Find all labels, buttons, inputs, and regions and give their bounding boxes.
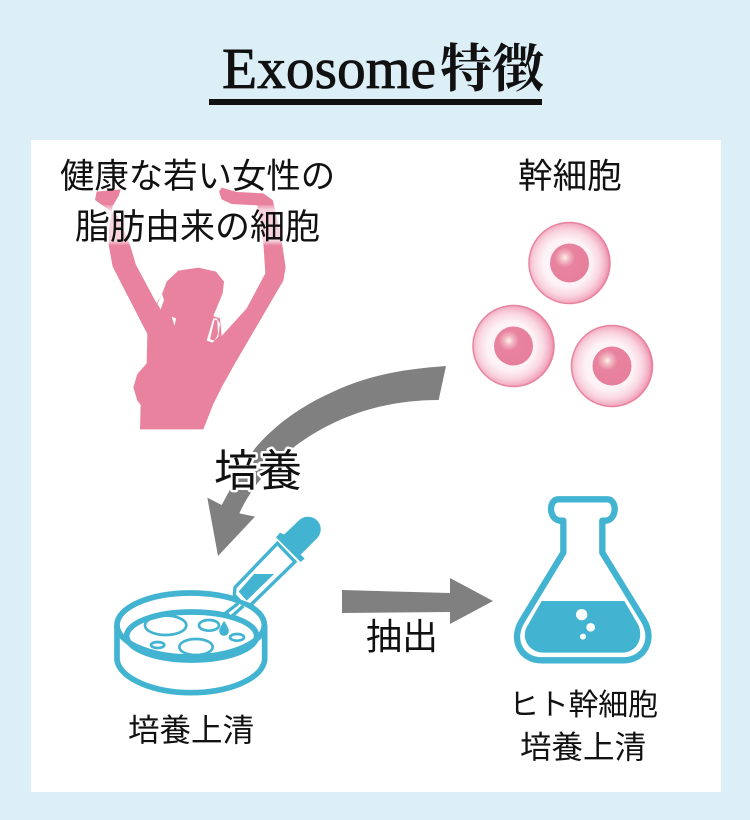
arrow: extraction (342, 578, 493, 624)
text: human stem cell supernatant label (509, 689, 658, 765)
text: donor label (60, 158, 335, 247)
icon: dropper liquid (239, 574, 274, 601)
panel: white content area (31, 140, 721, 792)
text: donor label: 健康な若い女性の (60, 158, 335, 196)
icon: dropper tube (234, 543, 295, 605)
icon: woman silhouette (90, 188, 290, 429)
text: culture supernatant label: 培養上清 (128, 712, 254, 748)
icon: petri dish and dropper (117, 517, 321, 693)
text: extraction label: 抽出 (366, 616, 438, 657)
icon: droplet (219, 621, 229, 636)
text: culture label: 培養 (214, 447, 302, 496)
text: stem cell label: 幹細胞 (518, 158, 622, 196)
text: donor label: 脂肪由来の細胞 (75, 208, 320, 247)
title (209, 27, 544, 105)
icon: stem cells (473, 222, 652, 406)
title: Exosome (222, 36, 436, 101)
arrow: culture curve (207, 366, 446, 556)
icon: flask (517, 499, 648, 660)
text: human stem cell supernatant label: 培養上清 (520, 729, 646, 765)
icon: dropper bulb (276, 517, 321, 562)
text: human stem cell supernatant label: ヒト幹細胞 (509, 689, 658, 722)
title: 特徴 (440, 27, 544, 102)
